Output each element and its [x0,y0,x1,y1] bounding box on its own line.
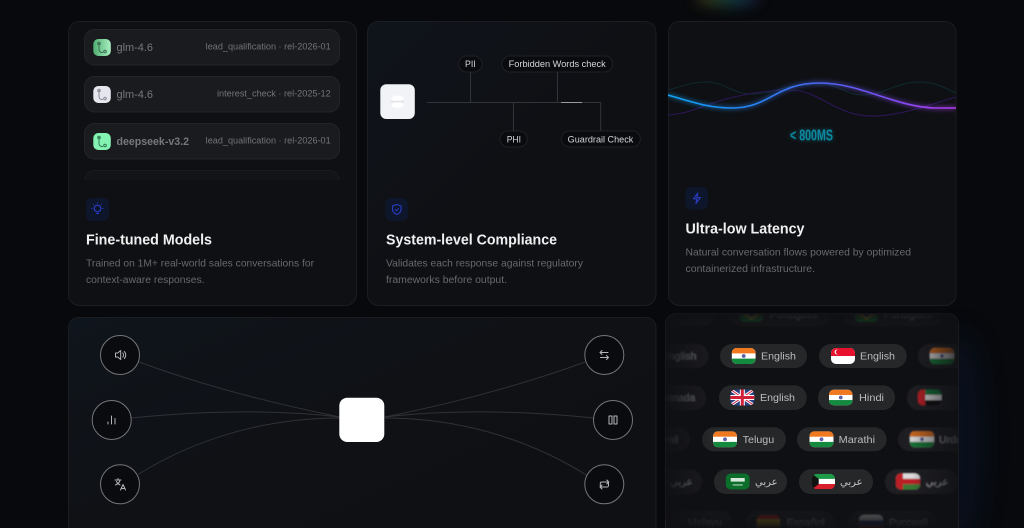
model row: glm-4.6 lead qualification: lead_qualification · rel-2026-01 [206,42,331,52]
row: english: English [860,350,895,362]
tag: PII: PII [465,59,476,69]
icon: lightning bolt [686,187,708,210]
tag: forbidden words check [502,56,613,72]
latency label: < 800MS [790,128,833,144]
row: portuguese: Português [884,309,932,321]
heading: fine-tuned models: Fine-tuned Models [86,232,212,248]
tag: PII [458,56,482,72]
model row: glm-4.6 lead qualification [84,30,340,65]
language pills [666,314,958,528]
icon: central logo tile [380,84,415,119]
icon: central white hub [339,398,384,442]
tag: PHI: PHI [507,134,521,144]
row: portuguese [740,314,931,322]
text block: fine-tuned description [86,258,314,286]
model row: glm-4.6 lead qualification: glm-4.6 [116,42,153,54]
tag: guardrail check [561,131,640,147]
row: tamil, telugu, marathi, urdu: Urdu [939,434,962,446]
connector lines [131,362,594,476]
text block: latency description: containerized infrastructure. [686,263,815,275]
icon: shield [386,198,408,221]
model row: glm-4.6 interest check: interest_check · rel-2025-12 [217,88,331,98]
text block: fine-tuned description: context-aware responses. [86,274,204,286]
edge fades [666,326,697,521]
row: kannada, english, hindi: English [760,392,795,404]
row: melayu, espanol, russian [688,514,928,528]
icon: speaker node [100,336,140,374]
model row: faded fourth row [84,170,340,180]
heading: ultra-low latency: Ultra-low Latency [686,222,804,238]
text block: compliance description: frameworks before output. [386,274,507,286]
latency label [790,128,833,144]
row: arabic [670,469,948,494]
model row: deepseek-v3.2 [84,124,340,159]
icon: bar chart node [92,400,131,440]
row: tamil, telugu, marathi, urdu: Tamil [655,434,678,446]
tag: forbidden words check: Forbidden Words check [509,59,606,69]
flow lines [427,72,601,131]
row: tamil, telugu, marathi, urdu: Telugu [743,434,774,446]
row: arabic: عربي [926,477,948,488]
row: english [669,344,956,368]
icon: light bulb [86,198,109,221]
icon: swap arrows node [585,336,624,374]
wave chart [668,82,956,116]
row: arabic: عربي [670,477,693,488]
model row: glm-4.6 interest check: glm-4.6 [116,89,153,101]
tag: PHI [500,131,527,147]
row: kannada, english, hindi: Kannada [655,392,695,404]
text block: compliance description [386,258,584,286]
icon: columns node [594,400,632,440]
row: arabic: عربي [755,477,778,488]
row: kannada, english, hindi: Hindi [859,392,884,404]
blue ambient glow behind language card [938,330,982,528]
row: english: English [761,350,796,362]
text block: fine-tuned description: Trained on 1M+ real-world sales conversations for [86,258,314,270]
model row: deepseek-v3.2: lead_qualification · rel-2026-01 [206,136,331,146]
tag: guardrail check: Guardrail Check [568,134,634,144]
icon: translate node [100,465,140,504]
panel: languages [665,314,959,528]
panel: integrations hub [68,318,656,528]
row: portuguese: Português [770,309,818,321]
text block: latency description [686,246,911,275]
panel: system-level compliance [368,22,656,306]
model row: deepseek-v3.2: deepseek-v3.2 [116,136,189,148]
row: tamil, telugu, marathi, urdu: Marathi [839,434,875,446]
model row: glm-4.6 interest check [84,76,340,112]
row: kannada, english, hindi [668,385,943,410]
row: tamil, telugu, marathi, urdu [669,427,958,452]
text block: latency description: Natural conversation flows powered by optimized [686,246,911,258]
icon: repeat node [585,465,624,504]
panel: fine-tuned models [68,22,356,306]
heading: system-level compliance: System-level Compliance [386,232,557,248]
row: english: English [662,350,697,362]
rainbow glow at top edge [696,0,760,6]
panel: ultra-low latency [668,22,956,306]
text block: compliance description: Validates each response against regulatory [386,258,584,270]
latency label: < 800MS [790,128,833,144]
row: arabic: عربي [840,477,863,488]
